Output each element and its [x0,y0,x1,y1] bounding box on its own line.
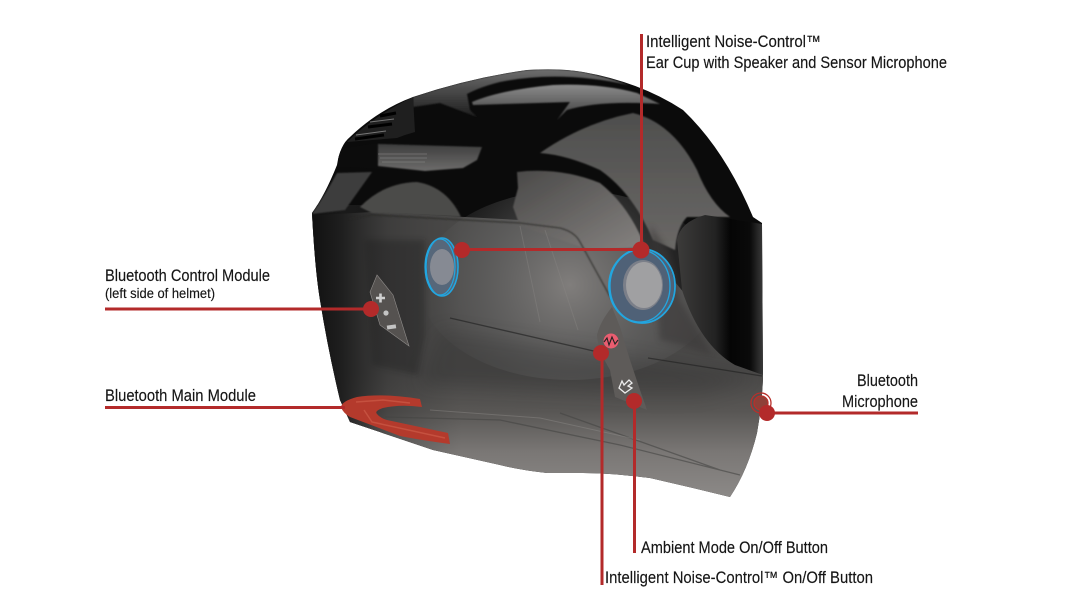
shoulder sheen [312,172,372,214]
ambient button icon [619,380,632,393]
label: ear cup: Ear Cup with Speaker and Sensor Microphone [646,54,947,72]
top vent [347,97,415,142]
label: microphone: Bluetooth [857,372,918,390]
label: ear cup [646,33,947,72]
callout: ear cup [454,34,650,258]
dark liner [438,338,714,391]
label: microphone [842,372,918,411]
callout: microphone [759,405,918,421]
side dome highlight [513,171,645,250]
callout: control module [105,301,379,317]
ear strap [650,229,705,350]
helmet illustration [300,60,780,505]
callout: noise control button [593,345,609,585]
right ear cup [609,249,675,323]
right button panel [597,307,647,410]
label: ambient button: Ambient Mode On/Off Button [641,539,828,557]
noise control button icon [604,334,618,348]
microphone rings [751,393,771,413]
callout lines and dots [105,34,918,585]
callout: ambient button [626,393,642,553]
shoulder ridge [338,152,340,160]
label: control module: (left side of helmet) [105,286,215,301]
label: ear cup: Intelligent Noise-Control™ [646,33,821,51]
helmet shell [300,60,780,505]
label: main module: Bluetooth Main Module [105,387,256,405]
upper dome highlight [540,113,730,250]
rear gray panel [360,182,461,217]
left control module [370,275,409,346]
crown highlight [472,85,660,120]
callout: main module [105,406,345,409]
main module [341,395,450,444]
label: microphone: Microphone [842,393,918,411]
lower translucent body [300,212,770,505]
label: control module: Bluetooth Control Module [105,267,270,285]
infographic: helmet diagram [105,34,946,587]
label: control module [105,267,270,301]
left ear cup [425,238,458,296]
dark rear liner [371,240,426,373]
crown sheen [413,69,628,117]
label: noise control button: Intelligent Noise-Control™ On/Off Button [605,569,873,587]
visor [677,215,763,375]
inner panel outline [378,214,610,299]
